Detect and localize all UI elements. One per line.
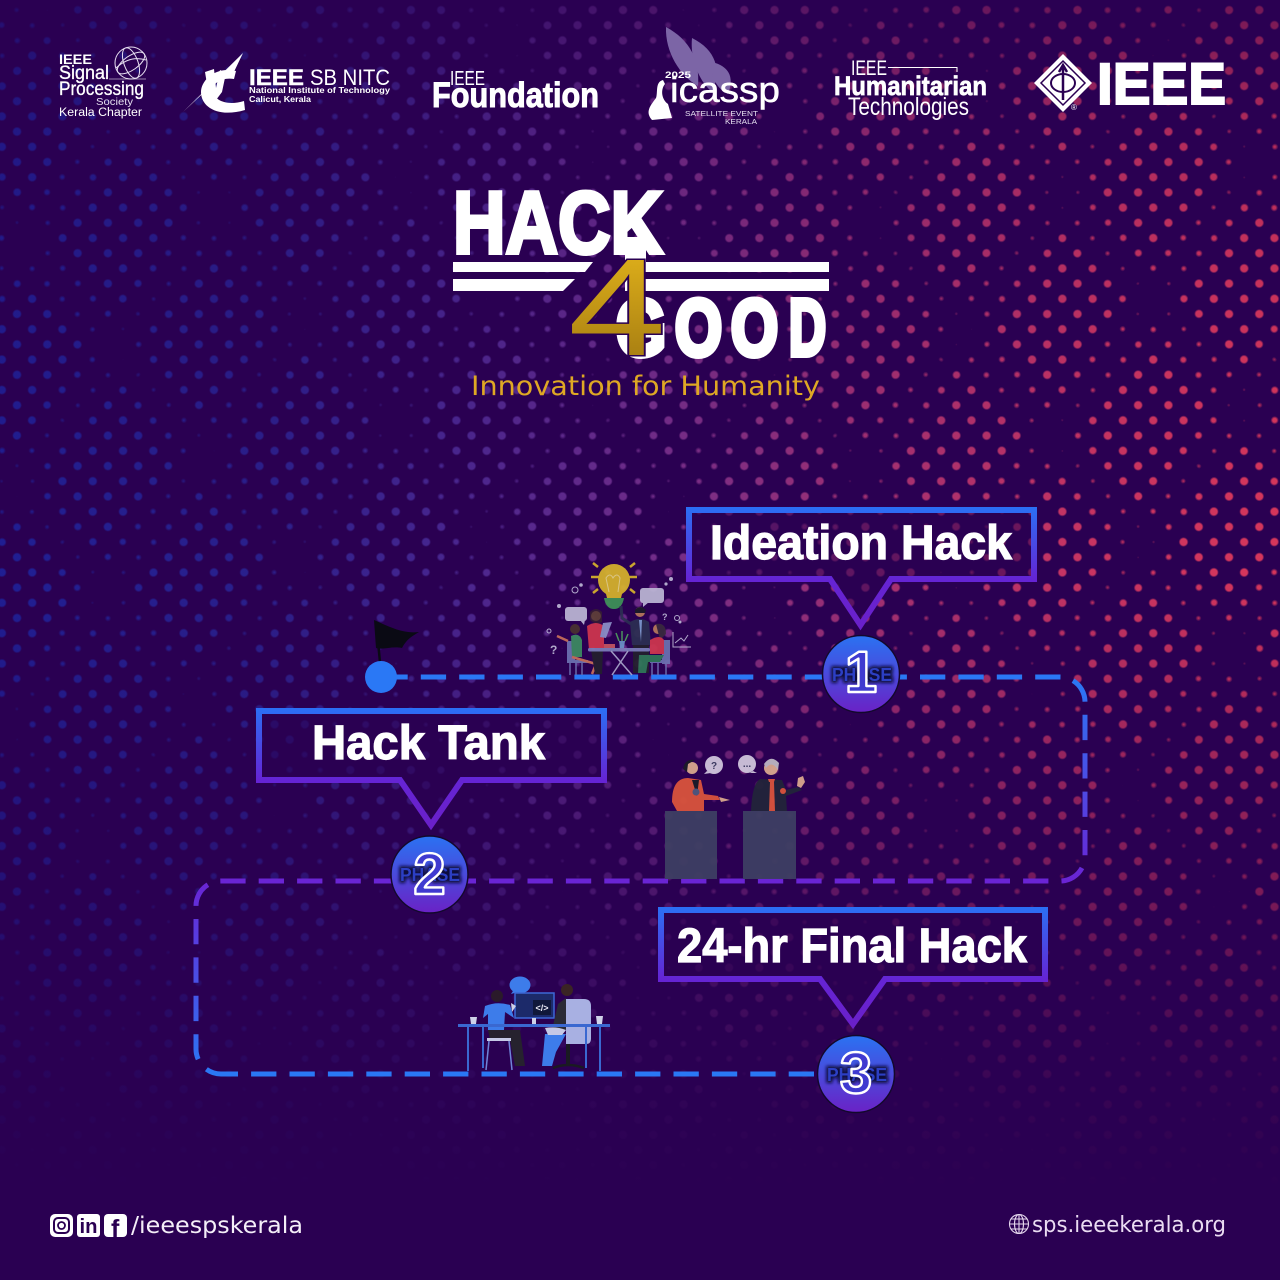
logo: IEEE Humanitarian Technologies: IEEE <box>851 57 887 80</box>
badge: phase 1: PHASE <box>832 665 892 685</box>
illustration: ideation team: ? <box>662 612 668 622</box>
icon: linkedin: in <box>80 1216 98 1238</box>
monitor <box>515 993 554 1024</box>
monitor: </> <box>535 1003 549 1013</box>
badge: phase 2: PHASE <box>400 865 460 885</box>
illustration: ideation team: ? <box>550 643 557 657</box>
gold numeral 4: 4 <box>568 231 666 385</box>
wordmark GOOD: D <box>789 283 826 372</box>
logo: ICASSP 2025 satellite event Kerala: icassp <box>670 69 780 110</box>
icon: globe <box>1010 1214 1028 1234</box>
logo: IEEE master brand: IEEE <box>1097 52 1226 117</box>
logo: ICASSP 2025 satellite event Kerala: SATELLITE EVENT <box>685 109 758 118</box>
logo: IEEE Foundation: IEEE <box>450 68 485 90</box>
logo: IEEE Humanitarian Technologies: Humanitarian <box>834 71 987 101</box>
table <box>588 631 650 675</box>
badge: phase 3: 3 <box>840 1041 872 1106</box>
speech bubbles <box>565 588 664 625</box>
person: standing man <box>621 606 651 673</box>
logo: IEEE SB NITC: National Institute of Technology <box>249 85 390 95</box>
speech bubble <box>510 976 530 994</box>
icon: facebook <box>104 1214 127 1243</box>
logo: IEEE SB NITC: IEEE <box>249 65 304 90</box>
wordmark GOOD: O <box>675 283 722 372</box>
badge: phase 3: PHASE <box>827 1065 887 1085</box>
presenter: woman <box>672 760 730 811</box>
callout: Hack Tank <box>259 711 604 825</box>
speech bubbles: ? <box>711 761 717 772</box>
icon: facebook: f <box>111 1215 120 1243</box>
logo: IEEE SB NITC <box>183 53 390 113</box>
logo: IEEE Signal Processing Society Kerala Chapter <box>59 46 148 119</box>
logo: IEEE Signal Processing Society Kerala Chapter: IEEE <box>59 51 92 67</box>
wordmark GOOD: G <box>616 283 666 372</box>
logo: IEEE Signal Processing Society Kerala Chapter: Society <box>96 97 133 108</box>
stool <box>486 1038 512 1070</box>
person: man with tablet <box>587 609 612 674</box>
logo: IEEE Humanitarian Technologies: Technologies <box>848 93 969 121</box>
callout: Hack Tank: Hack Tank <box>312 717 545 770</box>
badge: phase 2 <box>391 836 468 913</box>
timeline path <box>196 677 1085 1074</box>
badge: phase 1: PHASE <box>832 665 892 685</box>
logo: IEEE SB NITC: Calicut, Kerala <box>249 94 311 104</box>
logo: IEEE SB NITC: SB NITC <box>310 65 390 90</box>
light bulb <box>591 563 637 609</box>
logo: IEEE Signal Processing Society Kerala Chapter: Processing <box>59 79 144 100</box>
footer: social handle <box>50 1213 303 1243</box>
wordmark HACK: HACK <box>453 173 663 272</box>
badge: phase 2: 2 <box>413 842 446 907</box>
logo: IEEE Signal Processing Society Kerala Chapter: Signal <box>59 63 109 84</box>
illustration: ideation team <box>547 563 691 675</box>
logo: IEEE Foundation: Foundation <box>432 76 599 115</box>
wordmark GOOD <box>616 283 826 372</box>
office chair <box>545 999 591 1068</box>
footer: website: sps.ieeekerala.org <box>1032 1213 1226 1238</box>
callout: Ideation Hack: Ideation Hack <box>710 517 1012 570</box>
presenter: man <box>751 759 805 811</box>
decorative marks <box>547 587 691 647</box>
handle text: /ieeespskerala <box>131 1213 303 1239</box>
illustration: debate panel <box>665 755 805 879</box>
podiums <box>665 811 796 879</box>
logo: IEEE Signal Processing Society Kerala Chapter: Kerala Chapter <box>59 107 142 119</box>
logo row <box>59 27 1226 126</box>
logo bars <box>453 237 829 291</box>
start marker with flag <box>365 620 419 693</box>
callout: 24-hr Final Hack <box>661 910 1045 1024</box>
badge: phase 1 <box>822 636 900 712</box>
person: right woman <box>638 624 666 673</box>
logo: ICASSP 2025 satellite event Kerala: 2025 <box>665 70 691 80</box>
desk <box>458 1016 610 1071</box>
coder: right <box>542 984 573 1066</box>
badge: phase 2: PHASE <box>400 865 460 885</box>
wordmark GOOD: O <box>731 283 778 372</box>
callout: 24-hr Final Hack: 24-hr Final Hack <box>677 920 1027 973</box>
speech bubbles <box>704 755 757 774</box>
badge: phase 3: PHASE <box>827 1065 887 1085</box>
logo: IEEE Humanitarian Technologies <box>834 57 987 121</box>
title logo: Hack4Good <box>453 173 829 385</box>
person: left woman <box>557 624 596 674</box>
icon: instagram <box>50 1214 73 1237</box>
speech bubbles: ... <box>743 759 751 770</box>
illustration: coders at desk <box>458 976 610 1071</box>
logo: IEEE master brand <box>1034 52 1226 117</box>
callout: Ideation Hack <box>689 510 1034 625</box>
badge: phase 1: 1 <box>845 640 877 705</box>
tagline: Innovation for Humanity <box>471 371 820 402</box>
logo: ICASSP 2025 satellite event Kerala: KERALA <box>725 119 757 126</box>
logo: ICASSP 2025 satellite event Kerala <box>649 27 780 126</box>
badge: phase 3 <box>818 1036 894 1112</box>
chairs <box>567 640 670 675</box>
coder: left <box>483 990 525 1066</box>
logo: IEEE master brand: ® <box>1071 103 1077 112</box>
